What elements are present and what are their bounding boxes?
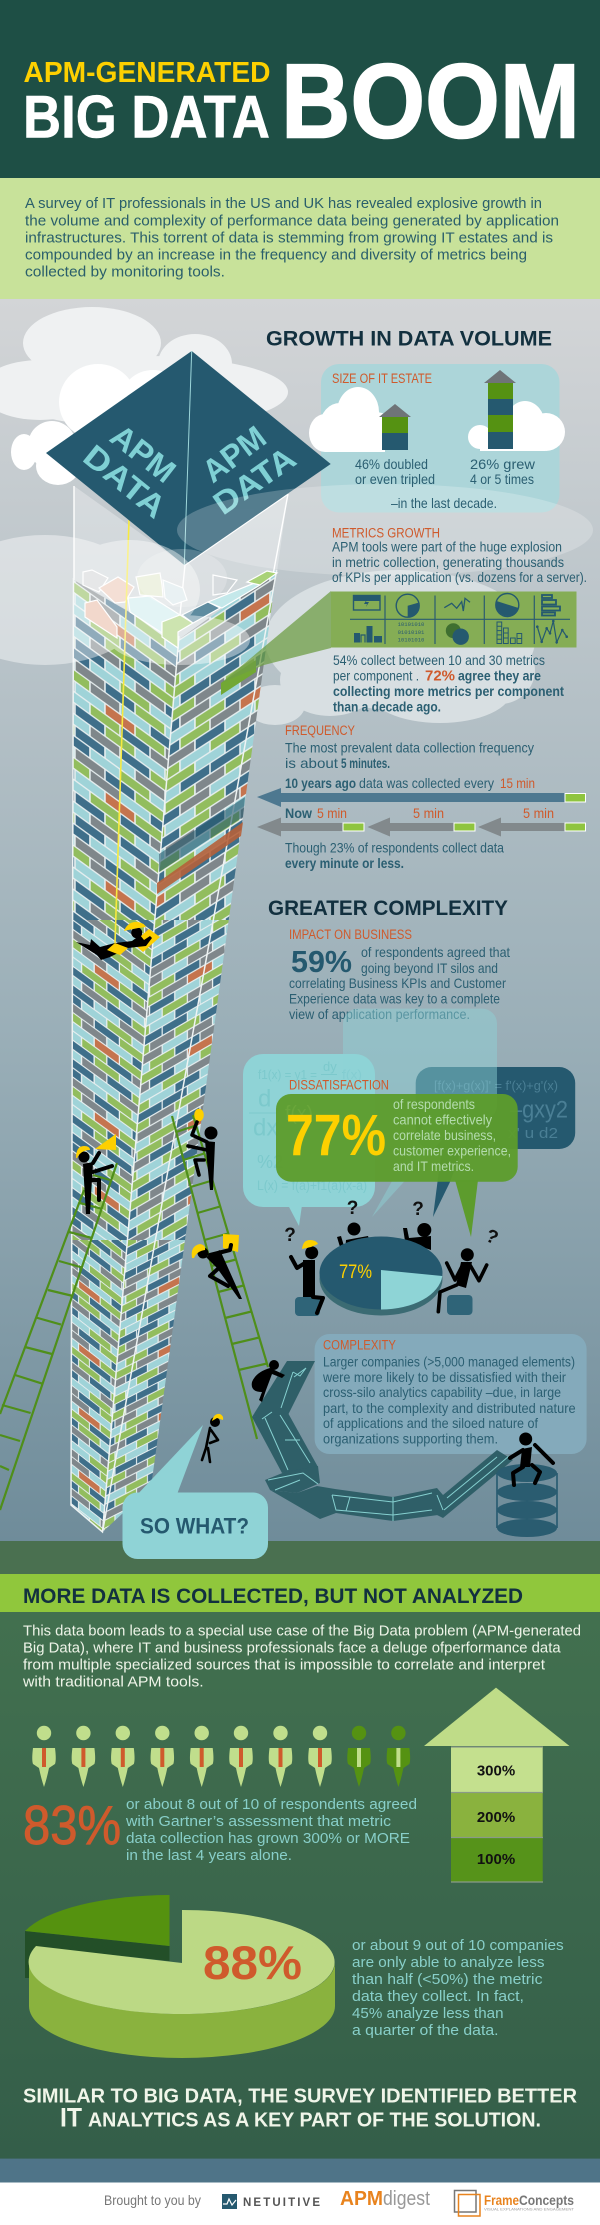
- question marks: ?: [412, 1199, 424, 1220]
- heading bar: more data is collected: MORE DATA IS COLLECTED, BUT NOT ANALYZED: [23, 1584, 523, 1608]
- stat text: 83%: [125, 1797, 417, 1864]
- arrow stack: growth percentages: 100%: [477, 1851, 515, 1868]
- worker crouching on map: [252, 1360, 285, 1402]
- complexity panel: of applications and the siloed nature of: [323, 1415, 538, 1431]
- speech bubble: dissatisfaction stat: customer experience,: [393, 1143, 511, 1159]
- frequency block: The most prevalent data collection frequency: [285, 740, 534, 756]
- arrow stack: growth percentages: 300%: [477, 1763, 515, 1780]
- speech bubble: light formulas: dy: [323, 1059, 337, 1074]
- metrics stat text: agree they are: [458, 667, 541, 683]
- stat text: 88%: data they collect. In fact,: [352, 1989, 524, 2005]
- header band: [0, 0, 600, 178]
- worker reaching on ladder: [188, 1109, 218, 1190]
- stats: or even tripled: [355, 471, 435, 487]
- worker on rope: [76, 922, 160, 960]
- logo: APMdigest: APM: [340, 2188, 383, 2210]
- conclusion: IT: [60, 2103, 82, 2133]
- speech bubble: dissatisfaction stat: correlate business,: [393, 1127, 496, 1143]
- section heading: growth in data volume: GROWTH IN DATA VOLUME: [266, 327, 552, 351]
- question marks: ?: [482, 1226, 501, 1249]
- tower: brick faces: [71, 570, 277, 1532]
- arrows: 5 minute intervals: [257, 818, 586, 836]
- metrics stat text: 54% collect between 10 and 30 metrics: [333, 652, 545, 668]
- frequency block: Though 23% of respondents collect data: [285, 840, 504, 856]
- speech bubble: so what: [122, 1425, 268, 1559]
- title: APM-GENERATED: APM-GENERATED: [24, 57, 270, 89]
- worker carrying paper: [192, 1234, 242, 1299]
- metrics growth text: METRICS GROWTH: [332, 526, 440, 540]
- frequency block: Now: [285, 805, 312, 821]
- impact on business: IMPACT ON BUSINESS: [289, 927, 412, 942]
- question marks: ?: [347, 1198, 358, 1219]
- logo: Netuitive: [222, 2194, 320, 2209]
- frequency block: is about: [285, 755, 338, 771]
- diamond: APM DATA sign: APM: [104, 417, 183, 490]
- speech bubble: light formulas: [243, 1054, 375, 1226]
- speech bubble: light formulas: f(x): [342, 1067, 362, 1082]
- stat text: 88%: 45% analyze less than: [352, 2006, 504, 2022]
- 3D pie chart: 88%: [25, 1895, 335, 2058]
- stat text: 88%: are only able to analyze less: [352, 1955, 544, 1971]
- complexity panel: cross-silo analytics capability –due, in large: [323, 1384, 561, 1400]
- frequency block: 5 min: [317, 806, 347, 821]
- stats: 46% doubled: [355, 456, 428, 472]
- speech bubble: dark formulas: [416, 1067, 575, 1217]
- dissatisfaction heading: DISSATISFACTION: [289, 1078, 389, 1093]
- footer: [0, 2182, 600, 2225]
- speech bubble: dissatisfaction stat: [276, 1094, 518, 1237]
- metrics stat text: per component .: [333, 667, 419, 683]
- speech bubble: dissatisfaction stat: and IT metrics.: [393, 1158, 474, 1174]
- diamond: APM DATA sign: [46, 351, 331, 565]
- frequency block: 5 minutes.: [341, 755, 390, 771]
- intro panel: infrastructures. This torrent of data is stemming from growing IT estates and is: [25, 230, 553, 246]
- speech bubble: dissatisfaction stat: 77%: [286, 1103, 386, 1168]
- stat text: 83%: or about 8 out of 10 of respondents agreed: [126, 1797, 417, 1813]
- stat text: 88%: than half (<50%) the metric: [352, 1972, 542, 1988]
- diamond: APM DATA sign: DATA: [77, 437, 173, 525]
- house small: [379, 404, 411, 450]
- intro panel: [0, 178, 600, 299]
- worker behind table left: [337, 1222, 370, 1252]
- question marks: [284, 1198, 501, 1249]
- speech bubble: light formulas: d: [258, 1086, 271, 1113]
- logo: Netuitive: NETUITIVE: [243, 2197, 320, 2209]
- worker looking down with question: [202, 1414, 223, 1462]
- metrics icon panel: [331, 592, 576, 648]
- metrics stat text: than a decade ago.: [333, 698, 441, 714]
- heading bar: more data is collected: [0, 1574, 600, 1612]
- worker with megaphone: [76, 1134, 116, 1214]
- translucent fog clouds: [0, 484, 593, 665]
- highlighted metric brick: [221, 660, 256, 695]
- database cylinder: [497, 1464, 557, 1537]
- metrics growth text: in metric collection, generating thousands: [332, 554, 564, 570]
- stat: 83%: 83%: [23, 1794, 121, 1856]
- analysis intro paragraph: [22, 1622, 581, 1690]
- cloud right: [468, 401, 565, 451]
- complexity panel: part, to the complexity and distributed nature: [323, 1400, 576, 1416]
- stats: [355, 456, 536, 511]
- section heading: greater complexity: GREATER COMPLEXITY: [268, 896, 508, 920]
- analysis intro paragraph: from multiple specialized sources that is impossible to correlate and interpret: [23, 1656, 546, 1673]
- stat text: 88%: or about 9 out of 10 companies: [352, 1938, 564, 1954]
- frequency block: FREQUENCY: [285, 723, 355, 738]
- icon: monitor: [354, 596, 380, 610]
- logo: FrameConcepts: Concepts: [519, 2193, 574, 2208]
- icon: binary digits: 01010101: [398, 629, 425, 636]
- impact on business: correlating Business KPIs and Customer: [289, 975, 506, 991]
- frequency block: 15 min: [500, 776, 535, 791]
- analysis intro paragraph: Big Data), where IT and business professionals face a deluge ofperformance data: [23, 1639, 561, 1656]
- intro panel: compounded by an increase in the frequency and diversity of metrics being: [25, 246, 527, 263]
- frequency block: every minute or less.: [285, 855, 404, 871]
- complexity panel: organizations supporting them.: [323, 1431, 498, 1447]
- speech bubble: light formulas: L(x) = f(a)+f1(a)(x-a): [257, 1178, 367, 1193]
- impact on business: view of application performance.: [289, 1006, 470, 1022]
- logo: FrameConcepts: Frame: [484, 2193, 519, 2208]
- glass top of tower: [74, 486, 288, 640]
- speech bubble: translucent blue: [343, 1009, 497, 1217]
- impact on business: Experience data was key to a complete: [289, 991, 500, 1007]
- conclusion: SIMILAR TO BIG DATA, THE SURVEY IDENTIFIED BETTER: [23, 2086, 578, 2108]
- speech bubble: light formulas: %2: [257, 1152, 283, 1172]
- worker seated right: [438, 1248, 487, 1312]
- stats: 4 or 5 times: [470, 471, 534, 487]
- icon: block columns: [497, 622, 522, 644]
- conclusion: ANALYTICS AS A KEY PART OF THE SOLUTION.: [88, 2110, 541, 2132]
- blue strip: [0, 2159, 600, 2183]
- pie wedge: [381, 1270, 442, 1310]
- speech bubble: light formulas: f1(x) = y1 =: [258, 1067, 317, 1082]
- stat text: 88%: [352, 1938, 564, 2039]
- icon: binary digits: 10101010: [398, 636, 425, 644]
- sky background: [0, 299, 600, 1541]
- yellow rope: [115, 520, 129, 943]
- metrics stat text: 72%: [425, 667, 455, 684]
- footer: Brought to you by: [104, 2192, 201, 2208]
- speech bubble: dark formulas: –gxy2: [510, 1097, 568, 1124]
- highlighted brick rows on tower: [157, 797, 245, 894]
- speech bubble: dark formulas: x' u d2: [508, 1125, 558, 1142]
- speech bubble: dark formulas: [f(x)+g(x)]' = f'(x)+g'(x): [434, 1078, 558, 1093]
- complexity panel: were more likely to be dissatisfied with their: [322, 1369, 566, 1385]
- icon: filled pie: [496, 594, 519, 616]
- speech bubble: dissatisfaction stat: f(x): [285, 1103, 313, 1125]
- complexity panel: COMPLEXITY: [323, 1338, 396, 1353]
- analysis intro paragraph: This data boom leads to a special use case of the Big Data problem (APM-generated: [23, 1622, 581, 1639]
- worker on database: [510, 1432, 553, 1485]
- icon: bar chart: [354, 626, 382, 642]
- stat text: 83%: with Gartner’s assessment that metric: [125, 1814, 391, 1830]
- people row: 8 of 10: [32, 1726, 410, 1787]
- analysis intro paragraph: with traditional APM tools.: [22, 1673, 204, 1690]
- frequency block: 5 min: [523, 806, 554, 821]
- stat text: 83%: in the last 4 years alone.: [126, 1848, 292, 1864]
- light cloud behind metrics text: [245, 570, 535, 725]
- metrics stat text: [333, 652, 564, 714]
- complexity panel: [315, 1334, 587, 1454]
- impact on business: [289, 927, 510, 1022]
- house tall: [484, 370, 516, 449]
- ground band: [0, 1541, 600, 1574]
- icon: pie outline: [396, 594, 419, 617]
- right ladder: [172, 1115, 268, 1439]
- loose bricks on top of tower: [83, 570, 277, 648]
- cloud left: [309, 387, 397, 452]
- impact on business: 59%: [291, 944, 352, 979]
- impact on business: of respondents agreed that: [361, 944, 510, 960]
- icon: line chart: [536, 620, 568, 644]
- icon: horizontal bars: [542, 595, 560, 616]
- table meeting group: [284, 1198, 501, 1316]
- logo: FrameConcepts: VISUAL EXPLANATIONS AND ENGAGEMENT: [484, 2208, 575, 2212]
- worker seated left: [291, 1240, 323, 1313]
- metrics stat text: collecting more metrics per component: [333, 683, 564, 699]
- stat text: 88%: a quarter of the data.: [352, 2023, 498, 2039]
- speech bubble: light formulas: dx: [253, 1115, 278, 1142]
- size of IT estate panel background: [321, 364, 560, 512]
- diamond: APM DATA sign: APM: [195, 419, 273, 490]
- arrow stack: growth percentages: [424, 1688, 570, 1882]
- table: [320, 1242, 442, 1316]
- logo: FrameConcepts: [454, 2190, 575, 2216]
- heading: SIZE OF IT ESTATE: [332, 371, 432, 386]
- stats: 26% grew: [470, 456, 536, 472]
- clouds behind diamond: [0, 307, 288, 485]
- arrow: 15 minute interval: [257, 788, 586, 807]
- conclusion: [23, 2086, 578, 2133]
- left ladder: [0, 1163, 117, 1510]
- diamond: APM DATA sign: DATA: [206, 439, 302, 522]
- size of IT estate panel: [309, 370, 565, 511]
- section background: analysis: [0, 1612, 600, 2159]
- callout beam from brick to metrics panel: [221, 591, 331, 683]
- stools: [295, 1295, 472, 1316]
- speech bubble: dissatisfaction stat: cannot effectively: [393, 1112, 492, 1128]
- metrics growth text: [332, 526, 587, 585]
- metrics growth text: APM tools were part of the huge explosion: [332, 538, 562, 554]
- icon: binary digits: 10101010: [398, 621, 425, 628]
- title: BIG DATA: BIG DATA: [23, 84, 270, 150]
- impact on business: going beyond IT silos and: [361, 960, 498, 976]
- logo: APMdigest: digest: [383, 2188, 430, 2210]
- 3D pie chart: 88%: 88%: [203, 1936, 302, 1989]
- icon: spark line: [444, 598, 470, 611]
- frequency block: data was collected every: [359, 775, 494, 791]
- worker behind table right: [403, 1223, 431, 1250]
- intro panel: collected by monitoring tools.: [25, 263, 225, 280]
- arrow stack: growth percentages: 200%: [477, 1809, 515, 1826]
- icon: venn circles: [446, 623, 469, 645]
- table label: 77%: [339, 1262, 372, 1283]
- intro panel: the volume and complexity of performance data being generated by application: [25, 212, 559, 229]
- question marks: ?: [284, 1225, 296, 1246]
- intro panel: A survey of IT professionals in the US and UK has revealed explosive growth in: [25, 195, 542, 212]
- icon: binary digits: [398, 621, 425, 644]
- frequency block: 5 min: [413, 806, 444, 821]
- stats: –in the last decade.: [391, 495, 497, 511]
- frequency block: [257, 723, 586, 871]
- stat text: 83%: data collection has grown 300% or MORE: [126, 1831, 410, 1847]
- logo: APMdigest: [340, 2188, 430, 2210]
- speech bubble: dissatisfaction stat: of respondents: [393, 1096, 475, 1112]
- speech bubble: so what: SO WHAT?: [140, 1514, 249, 1539]
- frequency block: 10 years ago: [285, 775, 356, 791]
- folded map: [252, 1361, 513, 1521]
